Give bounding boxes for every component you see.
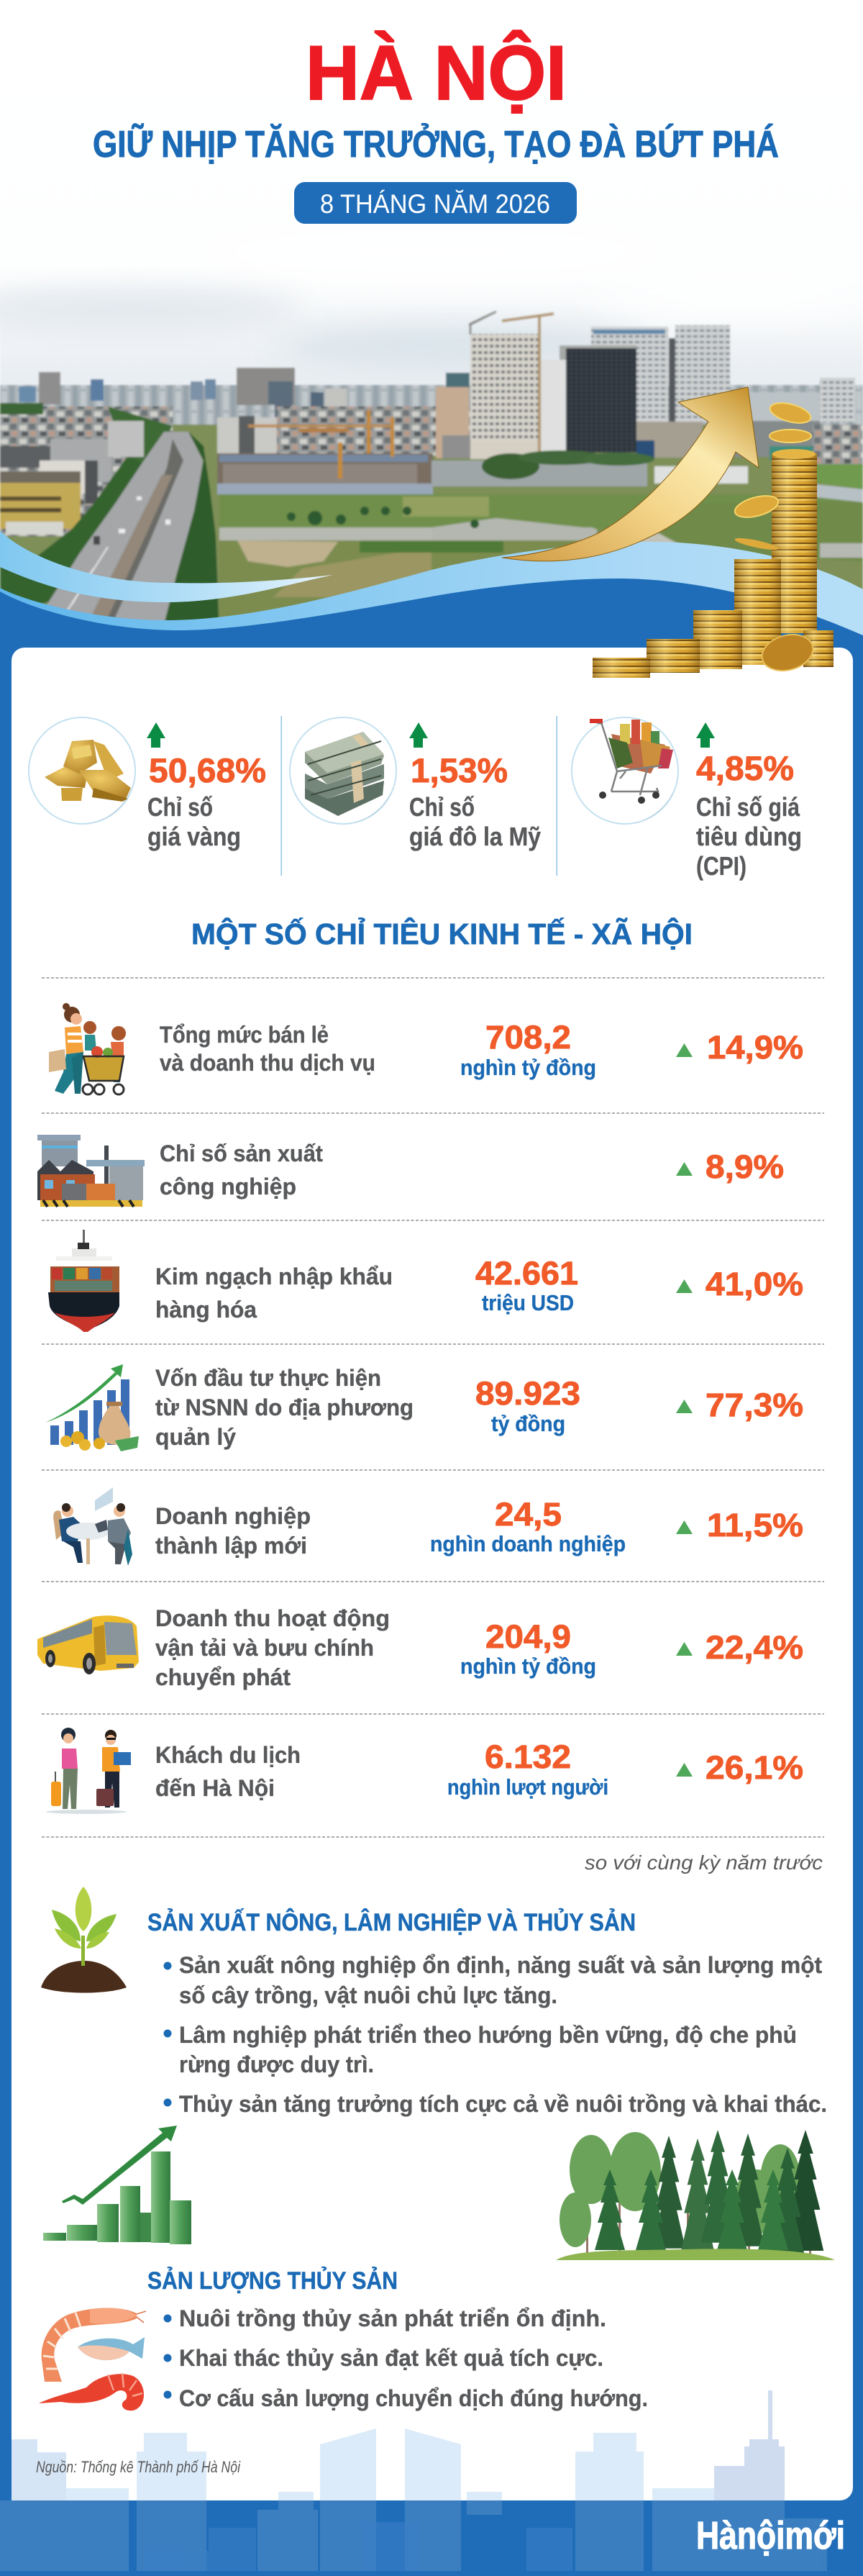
icon: dollar stacks	[290, 717, 396, 824]
icon: gold bars	[29, 717, 135, 824]
source note: Nguồn: Thống kê Thành phố Hà Nội	[36, 2458, 241, 2476]
value: 24,5	[495, 1496, 562, 1533]
value	[460, 1019, 596, 1080]
label: Chỉ số sản xuất	[160, 1140, 323, 1166]
panel: agriculture, forestry, fishery	[41, 1887, 835, 2260]
comparison note: so với cùng kỳ năm trước	[585, 1851, 823, 1874]
period badge	[294, 182, 577, 224]
bullet list: Cơ cấu sản lượng chuyển dịch đúng hướng.	[179, 2385, 648, 2411]
label: Kim ngạch nhập khẩu	[155, 1264, 393, 1289]
divider	[280, 716, 282, 876]
icon: container ship	[48, 1230, 119, 1332]
period badge: 8 THÁNG NĂM 2026	[320, 189, 550, 219]
icon: shrimp and fish	[39, 2308, 146, 2411]
growth	[676, 1148, 784, 1185]
row: retail sales	[49, 1003, 803, 1094]
icon: yellow bus	[37, 1615, 139, 1674]
section heading: MỘT SỐ CHỈ TIÊU KINH TẾ - XÃ HỘI	[191, 917, 693, 951]
value: 42.661	[475, 1255, 578, 1292]
label	[155, 1365, 414, 1450]
value: 708,2	[485, 1019, 571, 1056]
row: industrial production	[37, 1135, 784, 1207]
icon: green growth chart	[43, 2126, 191, 2244]
value	[447, 1738, 608, 1800]
value: nghìn doanh nghiệp	[430, 1531, 626, 1556]
consumer price index	[572, 717, 802, 881]
consumer price index: Chỉ số giá	[696, 792, 800, 822]
up arrow	[696, 722, 715, 748]
road	[29, 432, 203, 633]
dollar price index: Chỉ số	[409, 792, 475, 822]
icon: investment chart	[45, 1364, 139, 1451]
bullet list: Khai thác thủy sản đạt kết quả tích cực.	[179, 2345, 603, 2371]
value: triệu USD	[482, 1290, 574, 1315]
fields	[219, 463, 863, 627]
blue background	[0, 579, 863, 2576]
bullet list: rừng được duy trì.	[179, 2051, 374, 2077]
gold price index: 50,68%	[149, 751, 266, 789]
value	[475, 1375, 580, 1436]
icon: tourists	[46, 1728, 131, 1814]
label: Tổng mức bán lẻ	[160, 1022, 329, 1048]
panel: price indices	[29, 716, 802, 881]
decorative wave: light blue band	[0, 542, 863, 648]
consumer price index: tiêu dùng	[696, 822, 802, 851]
bullet list	[164, 2305, 648, 2411]
value: 89.923	[475, 1375, 580, 1412]
background photo: Hanoi skyline	[0, 0, 863, 648]
panel: fishery output	[39, 2267, 648, 2411]
consumer price index: 4,85%	[696, 749, 794, 787]
dollar price index: giá đô la Mỹ	[409, 822, 541, 851]
title: HÀ NỘI	[306, 30, 567, 116]
up arrow	[409, 722, 428, 748]
label: vận tải và bưu chính	[155, 1635, 374, 1661]
decorative wave: light ribbon	[0, 531, 333, 602]
icon: shopping cart	[572, 717, 678, 824]
gold coin stacks	[593, 399, 834, 678]
label: từ NSNN do địa phương	[155, 1394, 414, 1420]
growth: 22,4%	[706, 1629, 803, 1666]
heading: SẢN XUẤT NÔNG, LÂM NGHIỆP VÀ THỦY SẢN	[147, 1908, 636, 1936]
row: imports	[48, 1230, 803, 1332]
value: nghìn tỷ đồng	[460, 1654, 596, 1679]
label: quản lý	[155, 1424, 236, 1450]
icon: forest	[556, 2130, 835, 2260]
row: tourists	[46, 1728, 803, 1814]
gold price index: Chỉ số	[147, 792, 213, 822]
label: chuyển phát	[155, 1664, 291, 1690]
tree line and low buildings	[432, 421, 863, 486]
ground	[0, 425, 863, 640]
label: và doanh thu dịch vụ	[160, 1050, 375, 1076]
growth: 11,5%	[707, 1507, 803, 1543]
construction site	[217, 407, 471, 494]
label	[155, 1605, 390, 1690]
icon: sprout	[41, 1887, 127, 1993]
value	[460, 1618, 596, 1679]
label: Vốn đầu tư thực hiện	[155, 1365, 381, 1391]
label: Doanh thu hoạt động	[155, 1605, 390, 1631]
bullet list: số cây trồng, vật nuôi chủ lực tăng.	[179, 1982, 557, 2008]
icon: business meeting	[53, 1487, 132, 1566]
label: hàng hóa	[155, 1297, 257, 1323]
heading: SẢN LƯỢNG THỦY SẢN	[147, 2267, 398, 2295]
gold price index: giá vàng	[147, 822, 241, 851]
value	[430, 1496, 626, 1556]
row: new businesses	[53, 1487, 803, 1566]
gold arrow	[502, 387, 759, 561]
row: transport revenue	[37, 1605, 803, 1690]
bullet list: Sản xuất nông nghiệp ổn định, năng suất và sản lượng một	[179, 1952, 822, 1978]
value: 6.132	[485, 1738, 571, 1775]
value: tỷ đồng	[491, 1411, 565, 1436]
up arrow	[147, 722, 165, 748]
label	[155, 1742, 301, 1801]
label	[155, 1264, 393, 1323]
label: Khách du lịch	[155, 1742, 301, 1768]
value: nghìn tỷ đồng	[460, 1055, 596, 1080]
growth: 8,9%	[706, 1148, 784, 1185]
label	[160, 1022, 375, 1076]
decorative skyline on blue footer	[0, 2500, 827, 2571]
dollar price index: 1,53%	[411, 751, 508, 789]
label: đến Hà Nội	[155, 1775, 275, 1801]
icon: factory	[37, 1135, 145, 1207]
dollar price index	[290, 717, 541, 851]
label: thành lập mới	[155, 1533, 307, 1559]
growth: 26,1%	[706, 1749, 803, 1786]
label	[160, 1140, 323, 1199]
value	[475, 1255, 578, 1315]
main white card	[12, 648, 853, 1061]
value: 204,9	[485, 1618, 571, 1655]
bullet list: Thủy sản tăng trưởng tích cực cả về nuôi trồng và khai thác.	[179, 2091, 827, 2117]
consumer price index: (CPI)	[696, 851, 746, 881]
icon: family shopping	[49, 1003, 126, 1094]
label: Doanh nghiệp	[155, 1503, 311, 1529]
decorative skyline on card	[12, 2390, 785, 2500]
growth: 14,9%	[707, 1029, 803, 1066]
bullet list	[164, 1952, 827, 2117]
bullet list: Nuôi trồng thủy sản phát triển ổn định.	[179, 2305, 606, 2331]
distant city	[0, 368, 863, 435]
bullet list: Lâm nghiệp phát triển theo hướng bền vững, độ che phủ	[179, 2022, 797, 2048]
label	[155, 1503, 311, 1559]
growth: 41,0%	[706, 1266, 803, 1302]
left city blocks	[0, 403, 173, 612]
growth: 77,3%	[706, 1387, 803, 1423]
row: public investment	[45, 1364, 803, 1451]
gold price index	[29, 717, 266, 851]
towers	[436, 312, 730, 459]
value: nghìn lượt người	[447, 1774, 608, 1800]
label: công nghiệp	[160, 1174, 296, 1199]
